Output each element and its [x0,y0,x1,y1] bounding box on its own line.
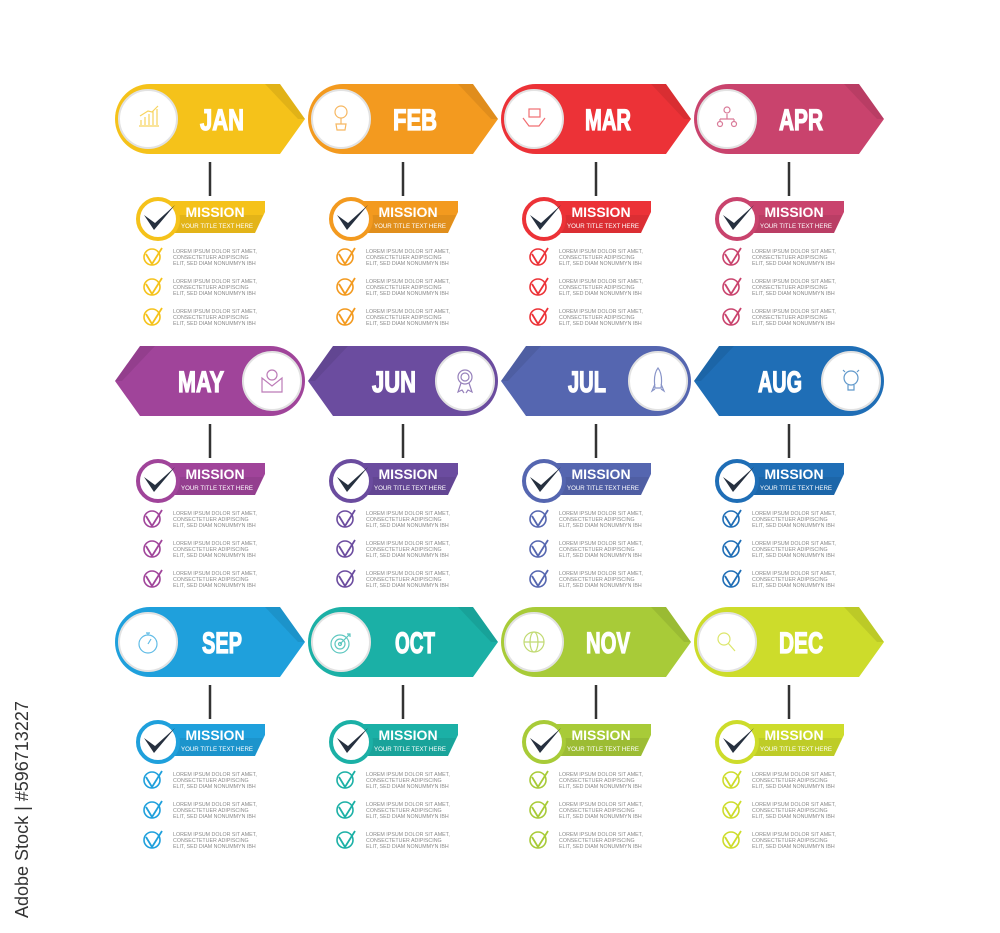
panel: JAN: MISSION [185,204,245,220]
icon: award [458,370,472,393]
icon: bulb [843,370,859,390]
panel: OCT: OCT [395,627,435,660]
panel: JUN: YOUR TITLE TEXT HERE [374,485,447,492]
panel: FEB: YOUR TITLE TEXT HERE [374,223,447,230]
panel: JAN: JAN [200,104,244,137]
panel: NOV: YOUR TITLE TEXT HERE [567,746,640,753]
panel: DEC: YOUR TITLE TEXT HERE [760,746,833,753]
icon: globe [524,632,544,652]
watermark label: Adobe Stock | #596713227 [12,701,32,918]
panel: AUG: AUG [758,366,802,399]
panel: JUL: JUL [568,366,606,399]
panel: JUL: YOUR TITLE TEXT HERE [567,485,640,492]
panel: FEB: MISSION [378,204,438,220]
panel: OCT: MISSION [378,727,438,743]
panel: JUL: MISSION [571,466,631,482]
panel: NOV [501,607,691,850]
panel: APR: MISSION [764,204,824,220]
panel: DEC: MISSION [764,727,824,743]
panel: JUN: MISSION [378,466,438,482]
panel: OCT [308,607,498,850]
panel: SEP: MISSION [185,727,245,743]
panel: DEC: DEC [779,627,823,660]
icon: rocket [652,368,664,391]
panel: MAY [115,346,305,589]
icon: plant coin [335,106,347,130]
panel: MAY: MAY [178,366,224,399]
panel: OCT: YOUR TITLE TEXT HERE [374,746,447,753]
panel: NOV: MISSION [571,727,631,743]
icon: team [718,107,736,126]
icon: envelope gear [262,370,282,392]
panel: JUN [308,346,498,589]
panel: JAN: YOUR TITLE TEXT HERE [181,223,254,230]
panel: MAR: MAR [585,104,631,137]
panel: JUL [501,346,691,589]
panel: SEP [115,607,305,850]
panel: AUG: YOUR TITLE TEXT HERE [760,485,833,492]
panel: JAN [115,84,305,327]
panel: NOV: NOV [586,627,630,660]
panel: SEP: YOUR TITLE TEXT HERE [181,746,254,753]
panel: AUG [694,346,884,589]
panel: APR: APR [779,104,823,137]
panel: APR: YOUR TITLE TEXT HERE [760,223,833,230]
panel: MAY: MISSION [185,466,245,482]
panel: MAR [501,84,691,327]
panel: MAR: YOUR TITLE TEXT HERE [567,223,640,230]
panel: MAR: MISSION [571,204,631,220]
panel: SEP: SEP [202,627,242,660]
panel: APR [694,84,884,327]
panel: FEB [308,84,498,327]
icon: magnifier [718,633,735,651]
panel: DEC [694,607,884,850]
panel: FEB: FEB [393,104,437,137]
panel: AUG: MISSION [764,466,824,482]
icon: stopwatch [139,633,157,653]
icon: target [331,634,350,653]
panel: MAY: YOUR TITLE TEXT HERE [181,485,254,492]
panel: JUN: JUN [372,366,416,399]
icon: chart [139,106,159,126]
icon: hands money [523,109,545,126]
